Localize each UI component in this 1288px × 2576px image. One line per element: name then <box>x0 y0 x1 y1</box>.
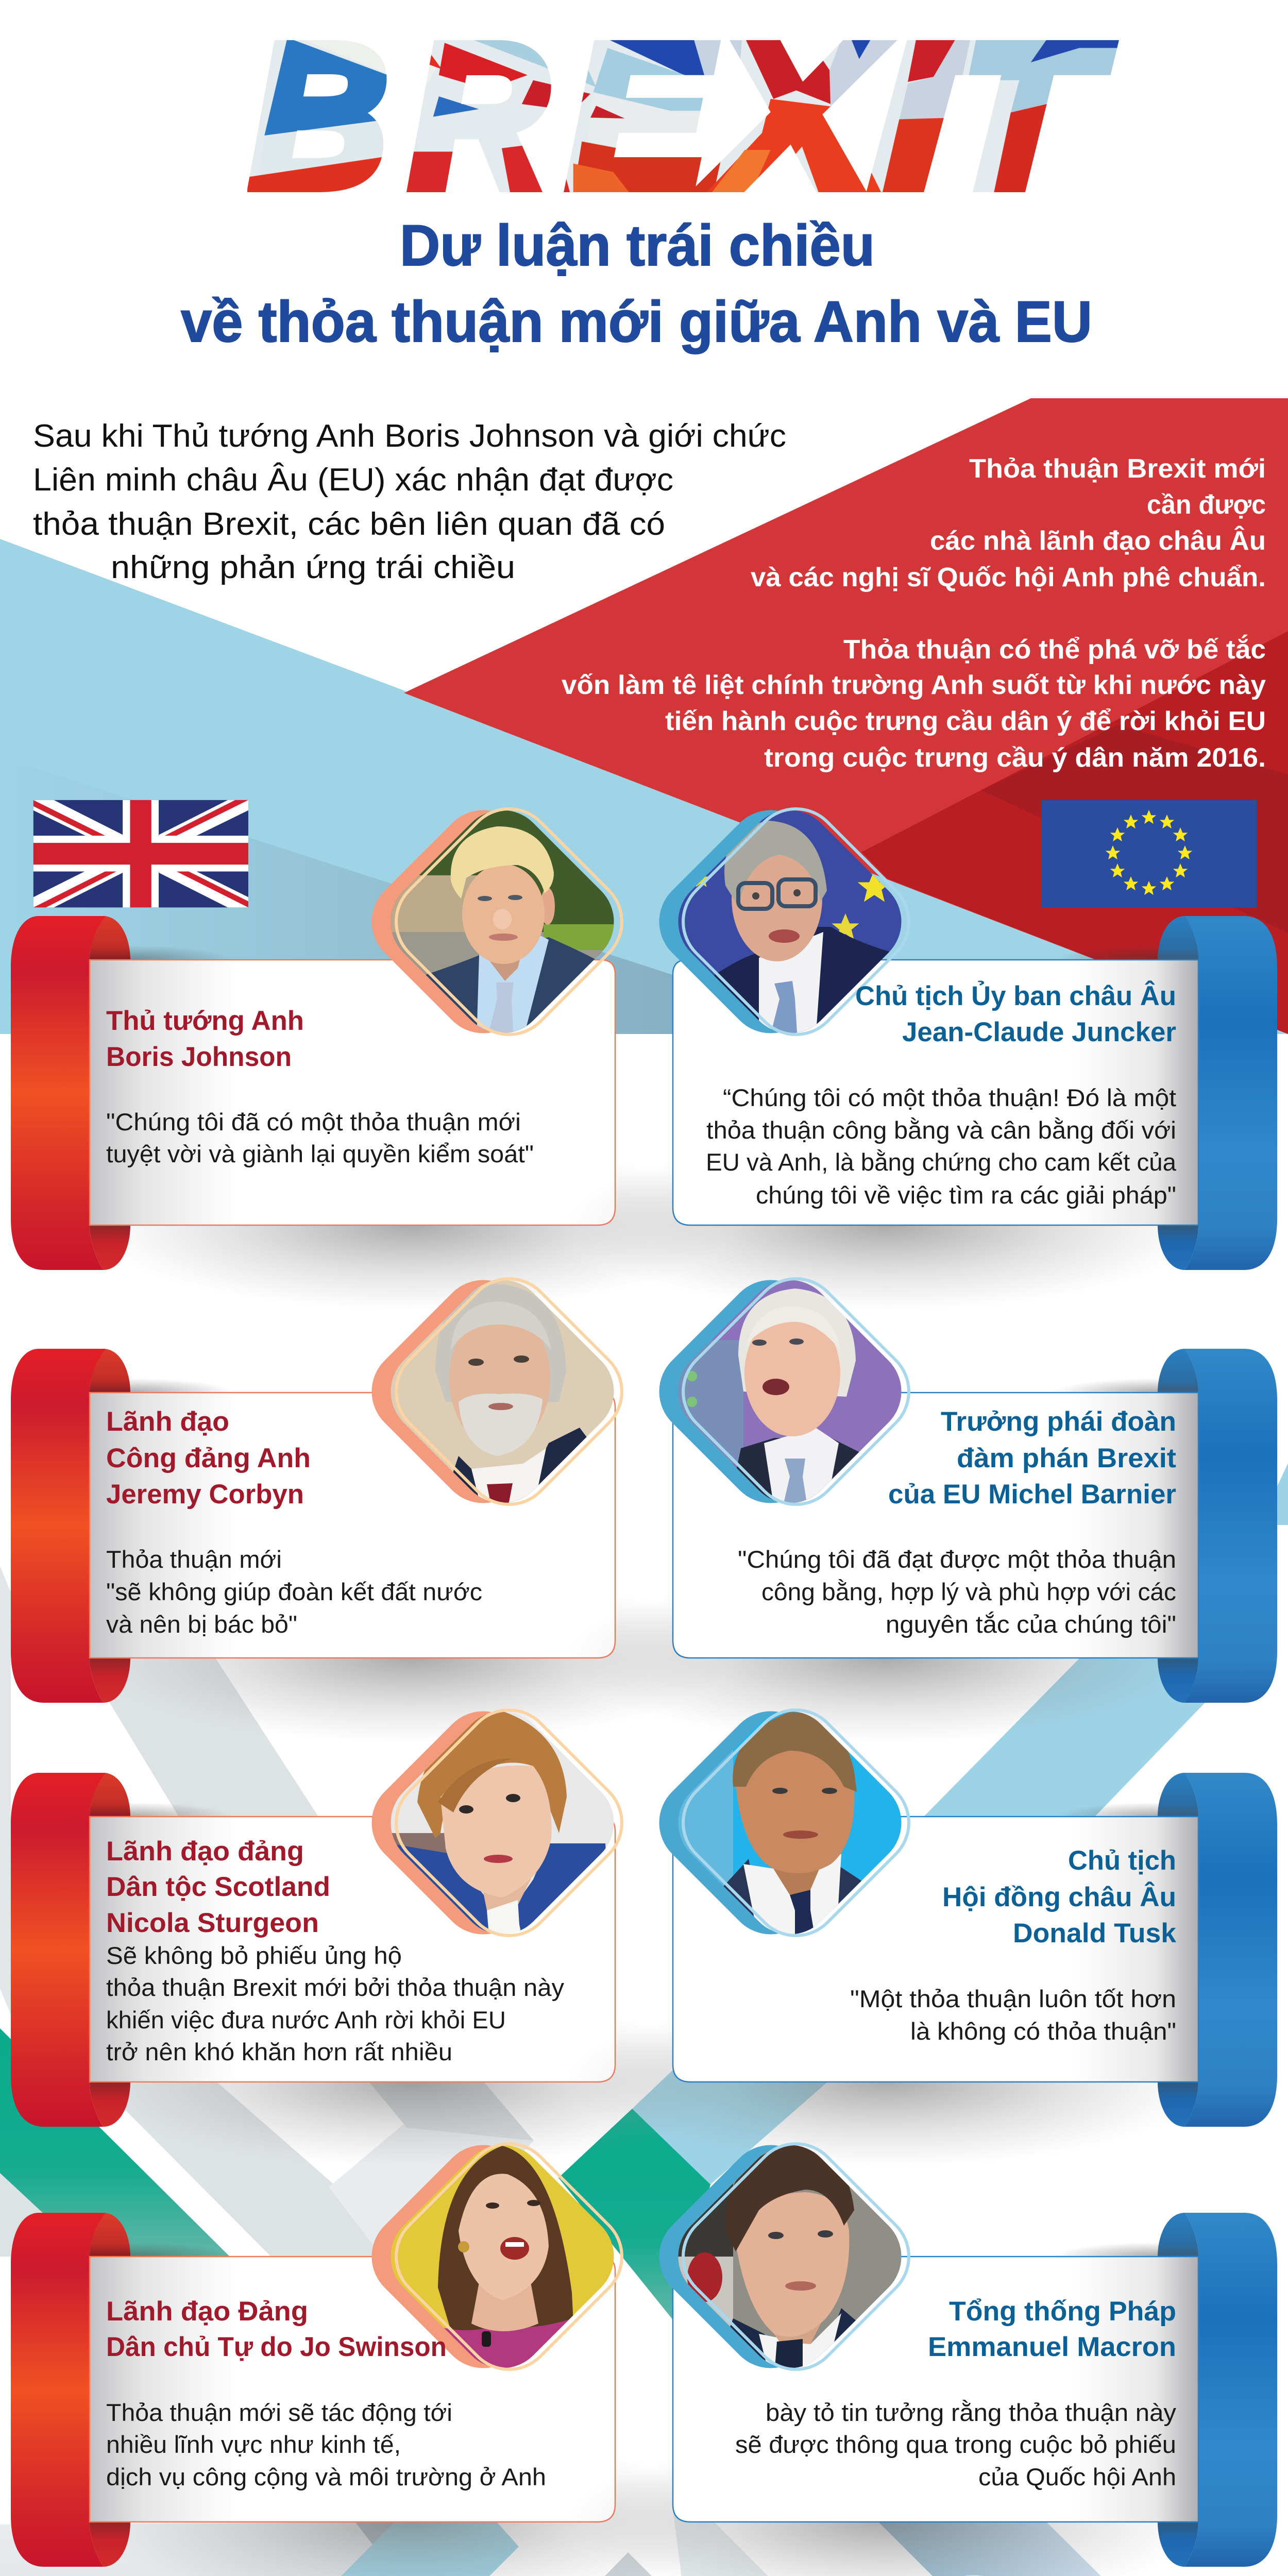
text: Boris Johnson <box>106 1006 534 1167</box>
portrait: Jean-Claude Juncker <box>659 807 910 1036</box>
text: Nicola Sturgeon: Nicola Sturgeon <box>106 1908 319 1938</box>
BREXIT wordmark: X <box>705 3 882 229</box>
text: Boris Johnson: Boris Johnson <box>106 1042 292 1072</box>
text: Jean-Claude Juncker <box>706 980 1177 1209</box>
intro text: Sau khi Thủ tướng Anh Boris Johnson và giới chức <box>33 418 786 454</box>
red panel text: cần được <box>1147 490 1266 520</box>
text: Nicola Sturgeon: Lãnh đạo đảng <box>106 1836 304 1867</box>
BREXIT wordmark: I <box>872 3 955 229</box>
intro text <box>33 418 786 585</box>
BREXIT wordmark <box>250 3 1111 229</box>
text: Michel Barnier <box>738 1406 1176 1638</box>
text: Donald Tusk: là không có thỏa thuận" <box>910 2018 1176 2045</box>
text: Emmanuel Macron: Tổng thống Pháp <box>949 2296 1176 2327</box>
text: Michel Barnier: đàm phán Brexit <box>957 1443 1176 1473</box>
text: Nicola Sturgeon: Dân tộc Scotland <box>106 1872 330 1902</box>
text: Michel Barnier: Trưởng phái đoàn <box>941 1406 1176 1437</box>
red panel text: vốn làm tê liệt chính trường Anh suốt từ khi nước này <box>562 670 1266 700</box>
text: Jeremy Corbyn: và nên bị bác bỏ" <box>106 1611 297 1638</box>
text: Jo Swinson <box>106 2296 546 2490</box>
text: Donald Tusk: Donald Tusk <box>1013 1918 1177 1948</box>
text: Emmanuel Macron: Emmanuel Macron <box>928 2332 1176 2362</box>
text: Michel Barnier: nguyên tắc của chúng tôi" <box>886 1611 1176 1638</box>
text: Emmanuel Macron <box>735 2296 1177 2490</box>
panel: Jacob Rees-Mogg <box>313 2558 1105 2576</box>
text: Emmanuel Macron: sẽ được thông qua trong cuộc bỏ phiếu <box>735 2431 1176 2458</box>
red panel text: Thỏa thuận Brexit mới <box>969 454 1266 484</box>
red panel text: các nhà lãnh đạo châu Âu <box>930 526 1266 556</box>
title: về thỏa thuận mới giữa Anh và EU <box>181 290 1092 354</box>
red panel text: trong cuộc trưng cầu ý dân năm 2016. <box>764 743 1266 773</box>
text: Michel Barnier: công bằng, hợp lý và phù hợp với các <box>761 1578 1176 1605</box>
text: Donald Tusk: "Một thỏa thuận luôn tốt hơn <box>850 1985 1176 2012</box>
portrait: Boris Johnson <box>372 807 623 1036</box>
title <box>181 213 1092 354</box>
text: Michel Barnier: "Chúng tôi đã đạt được một thỏa thuận <box>738 1546 1176 1573</box>
text: Jeremy Corbyn: Jeremy Corbyn <box>106 1479 304 1510</box>
text: Jo Swinson: dịch vụ công cộng và môi trường ở Anh <box>106 2463 546 2490</box>
text: Jeremy Corbyn: Công đảng Anh <box>106 1443 311 1473</box>
panel: Jean-Claude Juncker <box>567 790 1277 1310</box>
text: Jean-Claude Juncker: thỏa thuận công bằng và cân bằng đối với <box>706 1116 1176 1144</box>
text: Nicola Sturgeon: khiến việc đưa nước Anh rời khỏi EU <box>106 2006 506 2033</box>
BREXIT wordmark: E <box>568 3 716 229</box>
intro text: thỏa thuận Brexit, các bên liên quan đã có <box>33 506 665 542</box>
text: Emmanuel Macron: bày tỏ tin tưởng rằng thỏa thuận này <box>766 2399 1177 2426</box>
portrait: Nicola Sturgeon <box>372 1708 623 1937</box>
text: Jean-Claude Juncker: Chủ tịch Ủy ban châu Âu <box>855 980 1176 1011</box>
text: Jo Swinson: Dân chủ Tự do Jo Swinson <box>106 2332 447 2362</box>
text: Jean-Claude Juncker: Jean-Claude Juncker <box>902 1017 1176 1047</box>
text: Jo Swinson: Lãnh đạo Đảng <box>106 2296 308 2327</box>
red panel text: tiến hành cuộc trưng cầu dân ý để rời khỏi EU <box>665 706 1266 736</box>
portrait: Donald Tusk <box>641 1691 927 1954</box>
panel: Boris Johnson <box>11 790 732 1310</box>
text: Nicola Sturgeon: trở nên khó khăn hơn rất nhiều <box>106 2038 452 2065</box>
panel: Nicola Sturgeon <box>11 1691 732 2167</box>
text: Donald Tusk: Hội đồng châu Âu <box>942 1881 1176 1912</box>
text: Jean-Claude Juncker: “Chúng tôi có một thỏa thuận! Đó là một <box>723 1084 1176 1111</box>
red background panel <box>404 398 1288 1034</box>
text: Jean-Claude Juncker: EU và Anh, là bằng chứng cho cam kết của <box>706 1148 1177 1176</box>
icon: UK flag <box>33 800 248 907</box>
text: Boris Johnson: tuyệt vời và giành lại quyền kiểm soát" <box>106 1140 534 1167</box>
BREXIT wordmark: T <box>936 3 1111 229</box>
text: Donald Tusk <box>850 1845 1177 2045</box>
BREXIT wordmark: R <box>410 3 547 229</box>
panel: Emmanuel Macron <box>567 2125 1277 2576</box>
BREXIT wordmark: B <box>250 3 388 229</box>
intro text: những phản ứng trái chiều <box>111 550 515 585</box>
text: Michel Barnier: của EU Michel Barnier <box>888 1479 1176 1510</box>
portrait: Jo Swinson <box>353 2125 640 2388</box>
red panel text <box>562 454 1266 773</box>
panel: Jeremy Corbyn <box>11 1260 732 1743</box>
text: Jeremy Corbyn: Thỏa thuận mới <box>106 1546 282 1573</box>
text: Nicola Sturgeon: thỏa thuận Brexit mới bởi thỏa thuận này <box>106 1974 565 2001</box>
background diagonal stripes <box>0 1463 1288 2576</box>
portrait: Emmanuel Macron <box>641 2125 927 2388</box>
title: Dư luận trái chiều <box>400 213 875 278</box>
panel: Donald Tusk <box>567 1691 1277 2167</box>
portrait: Jeremy Corbyn <box>372 1277 623 1506</box>
text: Jo Swinson: Thỏa thuận mới sẽ tác động tới <box>106 2399 452 2426</box>
icon: EU flag <box>1042 800 1257 907</box>
text: Boris Johnson: "Chúng tôi đã có một thỏa thuận mới <box>106 1108 521 1136</box>
text: Jeremy Corbyn <box>106 1406 482 1638</box>
red panel text: Thỏa thuận có thể phá vỡ bế tắc <box>843 634 1266 665</box>
portrait: Michel Barnier <box>659 1277 910 1506</box>
text: Boris Johnson: Thủ tướng Anh <box>106 1006 304 1036</box>
panel: Michel Barnier <box>567 1260 1277 1743</box>
portrait: Jacob Rees-Mogg <box>818 2558 1105 2576</box>
text: Jo Swinson: nhiều lĩnh vực như kinh tế, <box>106 2431 401 2458</box>
text: Jeremy Corbyn: "sẽ không giúp đoàn kết đất nước <box>106 1578 482 1605</box>
text: Nicola Sturgeon: Sẽ không bỏ phiếu ủng hộ <box>106 1942 402 1969</box>
text: Donald Tusk: Chủ tịch <box>1068 1845 1176 1876</box>
text: Jean-Claude Juncker: chúng tôi về việc tìm ra các giải pháp" <box>756 1181 1176 1209</box>
text: Emmanuel Macron: của Quốc hội Anh <box>978 2463 1176 2490</box>
text: Jeremy Corbyn: Lãnh đạo <box>106 1406 229 1437</box>
text: Nicola Sturgeon <box>106 1836 565 2065</box>
red panel text: và các nghị sĩ Quốc hội Anh phê chuẩn. <box>751 563 1266 592</box>
panel: Jo Swinson <box>11 2125 732 2576</box>
light blue background panel <box>0 539 1288 1034</box>
intro text: Liên minh châu Âu (EU) xác nhận đạt được <box>33 462 673 498</box>
